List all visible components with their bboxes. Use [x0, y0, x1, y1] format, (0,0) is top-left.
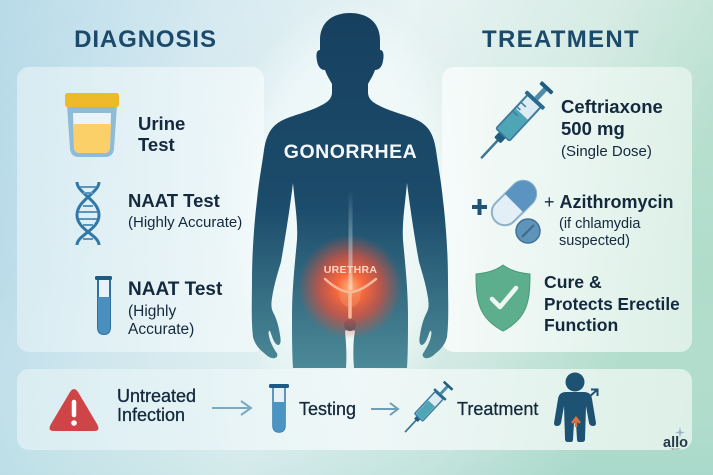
panel: diagnosis	[17, 67, 264, 352]
cure label: Function	[544, 315, 618, 335]
icon: plus	[472, 199, 487, 215]
arrow	[212, 401, 251, 415]
heading: diagnosis: DIAGNOSIS	[74, 26, 217, 53]
allo health logo: HEALTH	[671, 448, 681, 451]
central body figure	[252, 13, 448, 368]
soft glow behind body	[220, 0, 480, 420]
item: azithromycin	[472, 175, 674, 249]
untreated infection label: Untreated	[117, 386, 196, 406]
testing label: Testing	[299, 399, 356, 419]
cure label: Protects Erectile	[544, 294, 680, 314]
cure label: Cure &	[544, 272, 602, 292]
azithromycin label: + Azithromycin	[544, 192, 674, 212]
item: naat test tube	[95, 276, 223, 338]
naat label: NAAT Test	[128, 190, 220, 211]
urine test label: Test	[138, 134, 175, 155]
gonorrhea label: GONORRHEA	[284, 141, 417, 163]
spine line	[348, 190, 352, 290]
urine test label: Urine	[138, 113, 185, 134]
highly accurate label: Accurate)	[128, 321, 194, 338]
icon: syringe	[472, 78, 557, 167]
item: ceftriaxone	[472, 78, 663, 167]
highly accurate label: (Highly	[128, 303, 176, 320]
item: urine test	[65, 93, 185, 157]
allo health logo	[663, 427, 688, 451]
crotch shading	[344, 319, 356, 331]
single dose label: (Single Dose)	[561, 143, 652, 160]
item: naat test dna	[77, 182, 242, 245]
silhouette	[252, 13, 448, 368]
item: cure	[476, 265, 680, 335]
chlamydia note: suspected)	[559, 233, 630, 249]
panel: treatment	[442, 67, 692, 352]
untreated infection label: Infection	[117, 405, 185, 425]
icon: warning triangle	[50, 389, 98, 431]
icon: urine cup	[65, 93, 119, 157]
urethra glow	[298, 235, 402, 339]
allo health logo: allo	[663, 434, 688, 451]
urethra label: URETHRA	[324, 264, 377, 276]
icon: shield	[476, 265, 530, 331]
chlamydia note: (if chlamydia	[559, 216, 641, 232]
icon: dna	[77, 182, 99, 245]
pathway flow	[50, 372, 688, 451]
arrow	[371, 403, 398, 415]
icon: test tube	[95, 276, 112, 334]
icon: syringe	[399, 379, 455, 437]
heading: treatment: TREATMENT	[482, 26, 640, 53]
ceftriaxone label: 500 mg	[561, 118, 625, 139]
panel: pathway	[17, 369, 692, 450]
icon: capsule and pill	[486, 175, 542, 243]
treatment label: Treatment	[457, 399, 538, 419]
icon: person with male symbol	[554, 372, 598, 442]
highly accurate label: (Highly Accurate)	[128, 214, 242, 231]
icon: test tube	[269, 384, 289, 432]
ceftriaxone label: Ceftriaxone	[561, 96, 663, 117]
urethra organ	[325, 279, 376, 317]
naat label: NAAT Test	[128, 279, 223, 300]
